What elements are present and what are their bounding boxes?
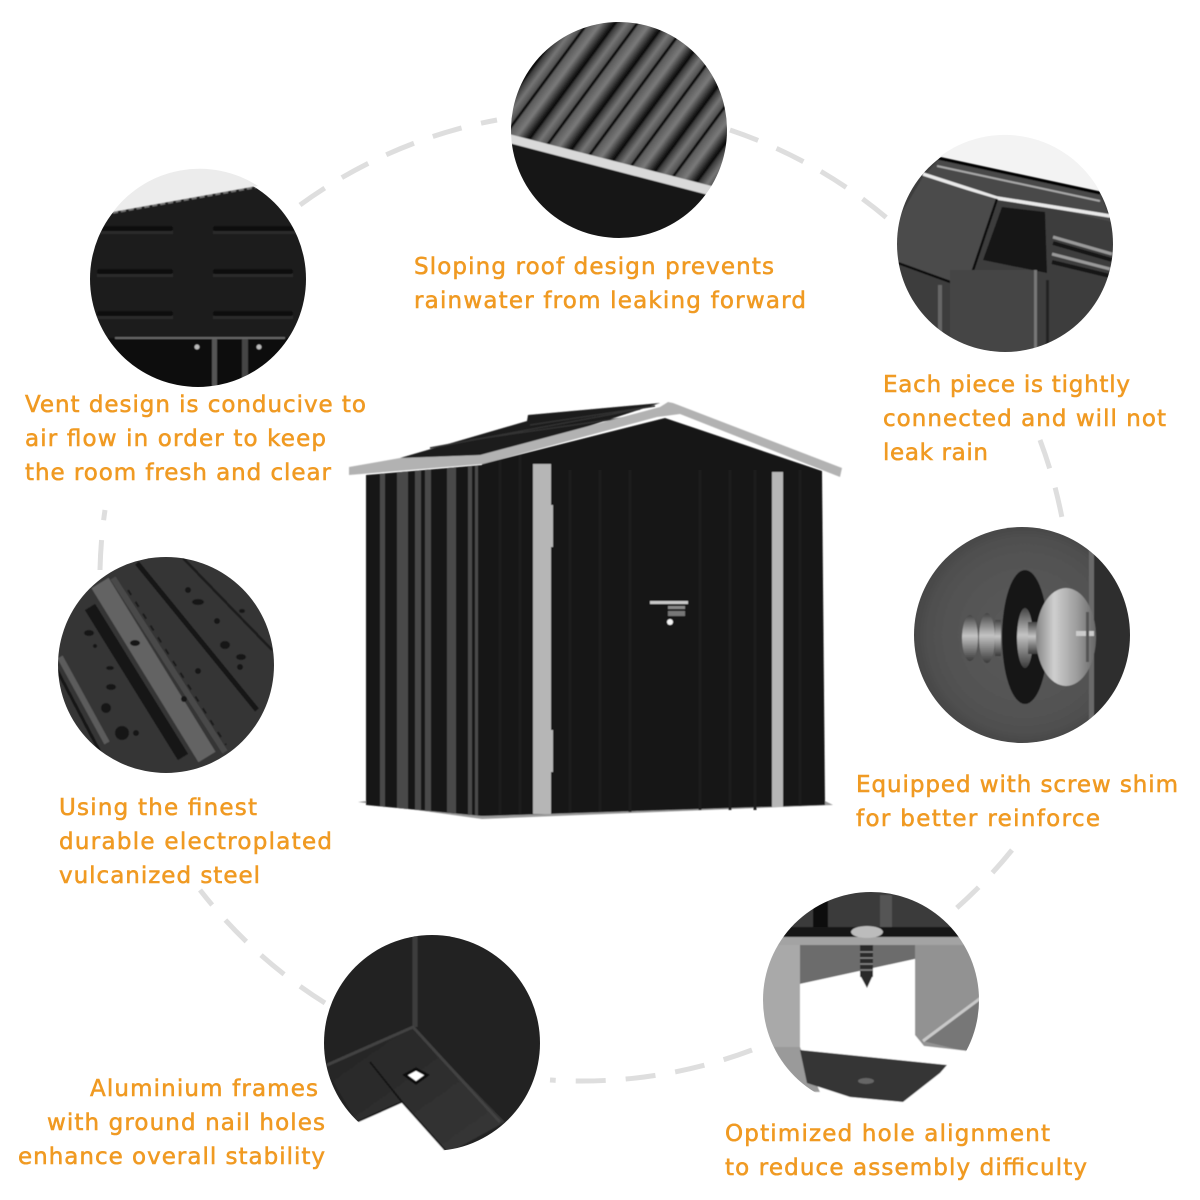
caption: vent design: Vent design is conducive to: [25, 392, 366, 418]
caption: aluminium frames: enhance overall stability: [18, 1144, 325, 1170]
caption: tightly connected: [883, 372, 1166, 466]
caption: screw shim: Equipped with screw shim: [856, 772, 1178, 798]
detail: hole alignment bracket: [763, 892, 979, 1103]
caption: vulcanized steel: Using the finest: [59, 795, 257, 821]
door latch: [650, 601, 688, 625]
caption: vent design: [25, 392, 366, 486]
detail: vent: [90, 168, 306, 387]
caption: tightly connected: leak rain: [883, 440, 988, 466]
caption: screw shim: [856, 772, 1178, 832]
detail: screw and shim: [914, 527, 1130, 743]
central shed illustration: [349, 402, 842, 820]
dashed connecting ring: [100, 120, 1065, 1081]
caption: sloping roof: Sloping roof design prevents: [414, 254, 774, 280]
caption: vulcanized steel: [59, 795, 332, 889]
caption: vent design: the room fresh and clear: [25, 460, 332, 486]
caption: tightly connected: connected and will not: [883, 406, 1166, 432]
detail: frame corner: [324, 935, 540, 1150]
caption: screw shim: for better reinforce: [856, 806, 1100, 832]
caption: vulcanized steel: vulcanized steel: [59, 863, 260, 889]
caption: hole alignment: to reduce assembly difficulty: [725, 1155, 1087, 1181]
detail: sloping roof: [511, 22, 727, 238]
caption: hole alignment: Optimized hole alignment: [725, 1121, 1050, 1147]
caption: hole alignment: [725, 1121, 1087, 1181]
caption: aluminium frames: Aluminium frames: [90, 1076, 318, 1102]
caption: sloping roof: rainwater from leaking forward: [414, 288, 806, 314]
caption: tightly connected: Each piece is tightly: [883, 372, 1130, 398]
caption: aluminium frames: with ground nail holes: [47, 1110, 325, 1136]
caption: vent design: air flow in order to keep: [25, 426, 326, 452]
caption: aluminium frames: [18, 1076, 325, 1170]
caption: vulcanized steel: durable electroplated: [59, 829, 332, 855]
detail: wet galvanized steel: [58, 557, 274, 773]
detail: roof joint: [897, 135, 1113, 352]
caption: sloping roof: [414, 254, 806, 314]
